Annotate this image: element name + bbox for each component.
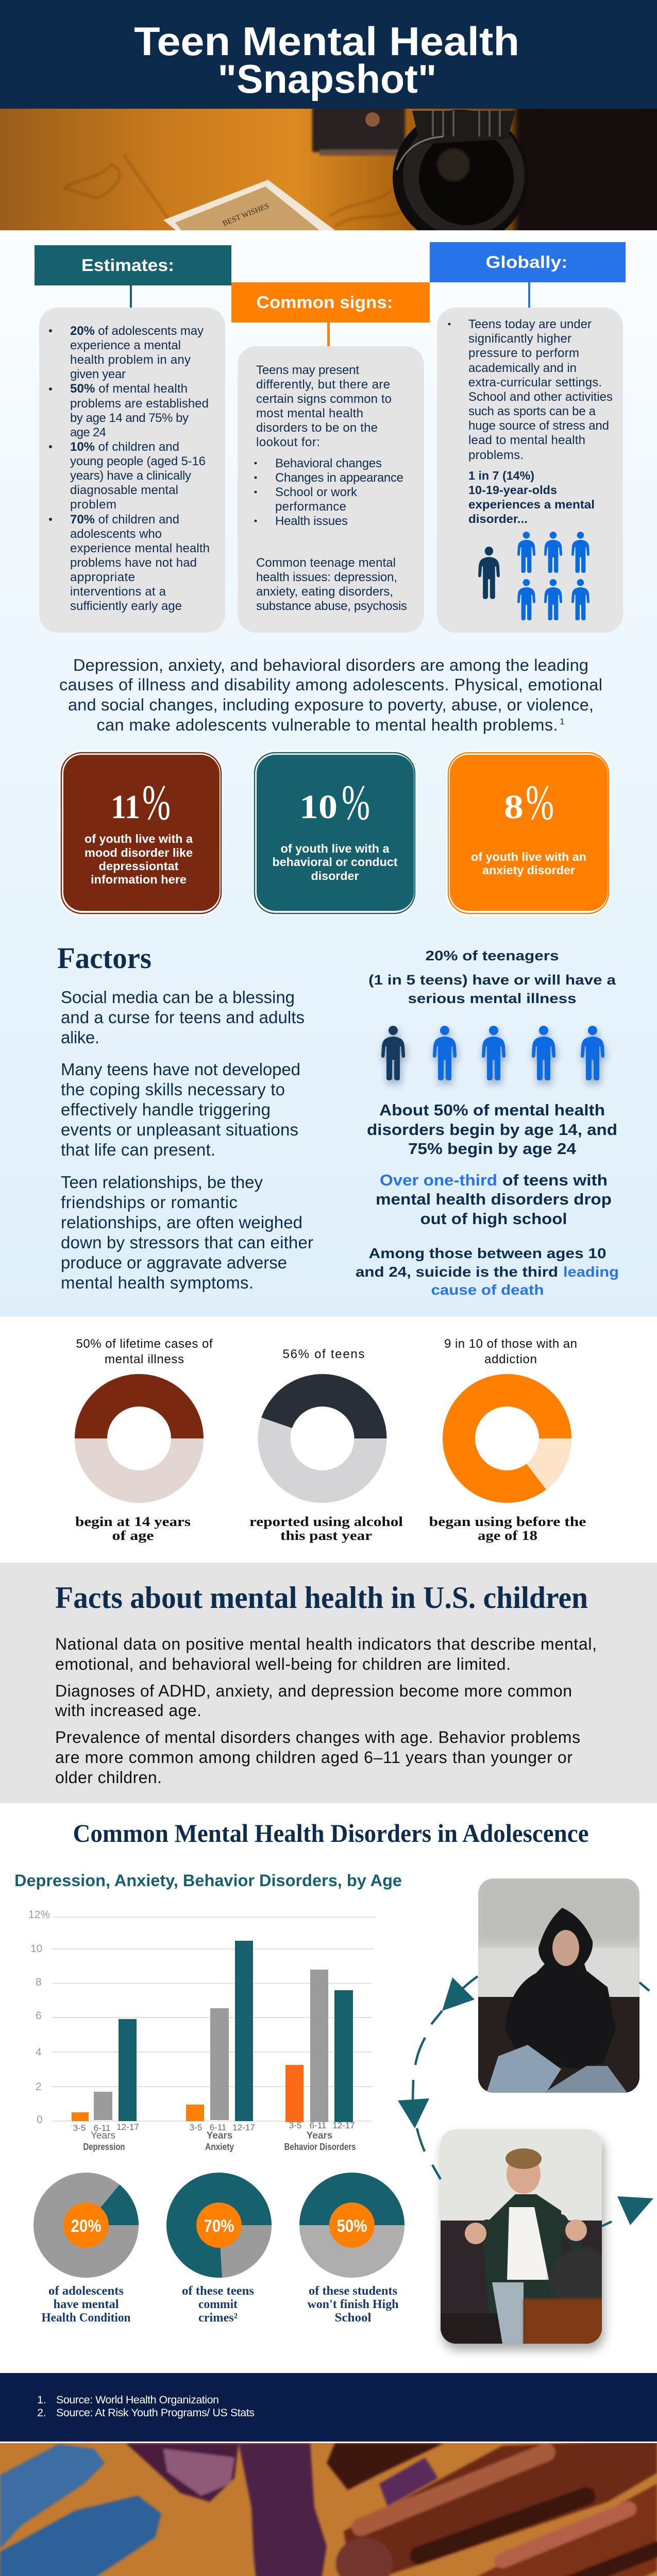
title: "Snapshot": [217, 56, 437, 101]
intro paragraph: [59, 656, 602, 734]
panel: factors: [57, 941, 313, 1292]
bar chart: disorders by age: [14, 1871, 402, 2152]
text: globally: experiences a mental: [468, 498, 595, 511]
text: common signs: Behavioral changes: [275, 456, 382, 470]
text: suicide: cause of death: [431, 1282, 544, 1298]
list: estimates: appropriate: [70, 570, 135, 584]
text: globally: pressure to perform: [468, 346, 579, 360]
text: factors: Social media can be a blessing: [61, 988, 295, 1007]
text: common signs: differently, but there are: [256, 378, 390, 392]
text: factors: [61, 988, 313, 1292]
text: factors: that life can present.: [61, 1140, 215, 1159]
text: high school dropout: out of high school: [420, 1210, 567, 1228]
stat card: 8%: %: [526, 775, 554, 831]
stat card: 8%: [446, 750, 611, 916]
donut chart: addiction: 9 in 10 of those with an: [444, 1337, 577, 1351]
header band: [0, 0, 657, 109]
title: [134, 19, 519, 101]
stat card: 10%: disorder: [311, 869, 359, 883]
donut chart: alcohol: 56% of teens: [282, 1347, 365, 1361]
stat card: 11%: %: [142, 775, 171, 831]
list: estimates: 10% of children and: [70, 440, 179, 454]
painting: reaching hands with heading: [0, 2439, 657, 2576]
text: common signs: most mental health: [256, 406, 363, 420]
list: estimates: 20% of adolescents may: [70, 324, 204, 338]
text: facts: with increased age.: [55, 1701, 201, 1720]
camera body: [312, 106, 405, 152]
text: common signs: Health issues: [275, 514, 348, 528]
pie chart: 70%: commit: [198, 2298, 238, 2311]
pie chart: 70%: of these teens: [182, 2284, 254, 2298]
text: common signs: [255, 363, 407, 613]
pie chart: 20%: have mental: [54, 2298, 119, 2311]
text: high school dropout: Over one-third: [380, 1171, 497, 1189]
text: globally: Teens today are under: [468, 317, 592, 331]
category labels: Years: [91, 2130, 115, 2141]
list: estimates: problems are established: [70, 397, 209, 411]
category labels: [73, 2121, 356, 2152]
axis labels: 10: [30, 1943, 42, 1955]
text: common signs: Teens may present: [256, 363, 359, 377]
text: factors: effectively handle triggering: [61, 1100, 271, 1119]
list: estimates: age 24: [70, 426, 106, 439]
donut chart: addiction: [429, 1337, 586, 1543]
text: factors: events or unpleasant situations: [61, 1120, 298, 1139]
text: globally: disorder...: [468, 512, 528, 526]
text: globally: [448, 317, 613, 526]
stat card: 11%: [59, 750, 223, 916]
text: factors: down by stressors that can either: [61, 1233, 313, 1252]
text: globally: significantly higher: [468, 332, 571, 346]
title: Teen Mental Health: [134, 19, 519, 64]
sources band: 1.: [37, 2394, 46, 2406]
list: estimates: 70% of children and: [70, 513, 179, 527]
text: facts: [55, 1635, 597, 1787]
stat card: 11%: depressiontat: [99, 859, 179, 873]
text: suicide: and 24, suicide is the third: [356, 1264, 558, 1280]
text: age of onset: [367, 1101, 617, 1158]
stat card: 11%: of youth live with a: [85, 832, 193, 845]
donut chart: alcohol: reported using alcohol: [249, 1514, 403, 1529]
category labels: 6-11: [94, 2123, 110, 2133]
text: common signs: certain signs common to: [256, 392, 392, 406]
text: one in five teens: (1 in 5 teens) have or will have a: [368, 972, 616, 988]
text: common signs: substance abuse, psychosis: [256, 599, 407, 613]
category labels: 12-17: [332, 2121, 355, 2130]
text: age of onset: 75% begin by age 24: [408, 1140, 577, 1158]
panel: common signs: [231, 282, 430, 633]
heading: factors: Factors: [57, 941, 151, 975]
text: facts: National data on positive mental health indicators that describe mental,: [55, 1635, 597, 1653]
panel: teen statistics: [356, 948, 619, 1298]
axis labels: 6: [36, 2010, 42, 2022]
list: estimates: years) have a clinically: [70, 469, 191, 483]
text: high school dropout: [376, 1171, 612, 1228]
heading: common signs: [231, 282, 430, 323]
axis labels: 12%: [28, 1909, 50, 1921]
text: factors: friendships or romantic: [61, 1193, 238, 1212]
stat card: 10%: behavioral or conduct: [272, 855, 398, 869]
hero photo: camera on a map: [0, 109, 657, 230]
text: suicide: [356, 1245, 619, 1298]
pie chart: 50%: [299, 2173, 405, 2325]
list: estimates: health problem in any: [70, 353, 191, 367]
category labels: Anxiety: [205, 2142, 234, 2152]
stat card: 11%: 11: [111, 788, 140, 826]
donut chart: alcohol: [249, 1347, 403, 1543]
text: facts: emotional, and behavioral well-being for children are limited.: [55, 1655, 511, 1673]
text: common signs: lookout for:: [256, 435, 320, 449]
category labels: 3-5: [73, 2123, 86, 2133]
text: globally: School and other activities: [468, 390, 613, 404]
text: factors: alike.: [61, 1028, 99, 1047]
bars: behavior disorders: [285, 1970, 353, 2122]
list: estimates: experience a mental: [70, 338, 181, 352]
text: common signs: Common teenage mental: [256, 556, 396, 570]
category labels: 3-5: [289, 2121, 301, 2130]
intro paragraph: and social changes, including exposure to poverty, abuse, or violence,: [68, 696, 594, 714]
donut chart: alcohol: this past year: [280, 1528, 372, 1543]
list: estimates: 50% of mental health: [70, 382, 188, 396]
bars: anxiety: [186, 1941, 253, 2121]
heading: facts: Facts about mental health in U.S. children: [55, 1581, 588, 1615]
donut chart: addiction: began using before the: [429, 1514, 586, 1529]
list: estimates: interventions at a: [70, 585, 166, 599]
pie chart: 50%: 50%: [337, 2216, 367, 2236]
bars: depression: [72, 2019, 137, 2121]
list: estimates: problem: [70, 498, 116, 512]
pie chart: 50%: won't finish High: [307, 2298, 399, 2311]
donut chart: lifetime cases: of age: [112, 1528, 154, 1543]
intro paragraph: 1: [560, 717, 565, 726]
pie chart: 50%: of these students: [309, 2284, 397, 2298]
text: one in five teens: 20% of teenagers: [426, 948, 559, 963]
category labels: 12-17: [116, 2122, 139, 2132]
list: estimates: sufficiently early age: [70, 599, 182, 613]
pie chart: 20%: 20%: [71, 2216, 101, 2236]
heading: common disorders: Common Mental Health Disorders in Adolescence: [73, 1819, 588, 1848]
text: factors: and a curse for teens and adults: [61, 1008, 305, 1027]
text: one in five teens: serious mental illness: [408, 991, 576, 1006]
heading: estimates: Estimates:: [81, 256, 174, 275]
stat card: 8%: 8: [504, 788, 524, 826]
stat card: 10%: of youth live with a: [280, 842, 390, 855]
text: globally: 10-19-year-olds: [468, 483, 557, 497]
text: globally: lead to mental health: [468, 433, 585, 447]
pie chart: 70%: [166, 2173, 272, 2325]
panel: facts about mental health: [0, 1563, 657, 1803]
main light background: [0, 230, 657, 1316]
category labels: Years: [307, 2130, 332, 2141]
donut chart: addiction: age of 18: [478, 1528, 537, 1543]
text: globally: academically and in: [468, 361, 577, 375]
sources band: Source: World Health Organization: [56, 2394, 219, 2406]
text: age of onset: About 50% of mental health: [379, 1101, 605, 1119]
stat card: 10%: 10: [299, 788, 338, 826]
list: estimates: adolescents who: [70, 527, 162, 541]
category labels: 12-17: [232, 2123, 255, 2132]
heading: common signs: Common signs:: [257, 293, 393, 312]
hero photo: camera on a map: BEST WISHES: [222, 202, 271, 228]
text: globally: problems.: [468, 448, 524, 462]
stat card: 10%: [253, 750, 416, 916]
text: suicide: Among those between ages 10: [369, 1245, 606, 1261]
heading: globally: [430, 242, 626, 282]
pie chart: 20%: of adolescents: [48, 2284, 124, 2298]
panel: globally: [430, 242, 626, 633]
category labels: Depression: [83, 2142, 125, 2152]
list: estimates: young people (aged 5-16: [70, 454, 206, 468]
text: age of onset: disorders begin by age 14, and: [367, 1121, 617, 1139]
axis labels: 8: [36, 1976, 42, 1988]
text: common signs: anxiety, eating disorders,: [256, 585, 393, 599]
text: globally: extra-curricular settings.: [468, 376, 602, 389]
category labels: 6-11: [210, 2123, 226, 2132]
list: estimates: given year: [70, 367, 126, 381]
text: factors: produce or aggravate adverse: [61, 1253, 287, 1272]
text: common signs: School or work: [275, 485, 358, 499]
list: estimates: [49, 324, 210, 613]
donut chart: lifetime cases: 50% of lifetime cases of: [76, 1337, 213, 1351]
text: factors: mental health symptoms.: [61, 1273, 254, 1292]
category labels: Years: [207, 2130, 232, 2141]
donut chart: addiction: addiction: [484, 1352, 537, 1366]
list: estimates: diagnosable mental: [70, 483, 178, 497]
donut chart: lifetime cases: mental illness: [105, 1352, 184, 1366]
text: common signs: Changes in appearance: [275, 471, 403, 485]
pie chart: 20%: Health Condition: [41, 2311, 131, 2325]
axis labels: [28, 1909, 50, 2126]
donut chart: lifetime cases: [75, 1337, 213, 1543]
text: facts: Prevalence of mental disorders changes with age. Behavior problems: [55, 1728, 580, 1747]
text: facts: Diagnoses of ADHD, anxiety, and depression become more common: [55, 1682, 572, 1700]
text: common signs: health issues: depression,: [256, 570, 397, 584]
text: factors: the coping skills necessary to: [61, 1080, 285, 1099]
list: estimates: problems have not had: [70, 556, 197, 570]
pie chart: 50%: School: [335, 2311, 372, 2325]
text: common signs: disorders to be on the: [256, 421, 378, 435]
intro paragraph: causes of illness and disability among adolescents. Physical, emotional: [59, 675, 602, 694]
sources band: 2.: [37, 2406, 46, 2419]
list: estimates: experience mental health: [70, 541, 210, 555]
photo: teen in black hoodie: [478, 1878, 639, 2095]
arrows: dashed circular cycle: [398, 1976, 653, 2226]
stat card: 11%: mood disorder like: [85, 846, 193, 859]
pie chart: 70%: 70%: [204, 2216, 234, 2236]
text: common signs: performance: [275, 500, 346, 514]
text: factors: Teen relationships, be they: [61, 1173, 263, 1192]
category labels: 3-5: [190, 2123, 202, 2132]
text: globally: huge source of stress and: [468, 419, 609, 433]
pie chart: 70%: crimes²: [198, 2311, 238, 2325]
category labels: Behavior Disorders: [284, 2142, 356, 2152]
chart title: Depression, Anxiety, Behavior Disorders, by Age: [14, 1871, 402, 1890]
heading: estimates: [35, 245, 231, 285]
icon: one in seven people: [478, 532, 589, 620]
lens: [393, 110, 529, 230]
donut chart: lifetime cases: begin at 14 years: [75, 1514, 191, 1529]
stat card: 10%: %: [342, 775, 370, 831]
text: facts: are more common among children aged 6–11 years than younger or: [55, 1748, 572, 1767]
intro paragraph: Depression, anxiety, and behavioral disorders are among the leading: [73, 656, 588, 674]
category labels: 6-11: [310, 2121, 326, 2130]
photo: smiling teen talking: [441, 2129, 614, 2345]
axis labels: 0: [37, 2114, 43, 2126]
text: globally: 1 in 7 (14%): [468, 469, 534, 482]
sources band: Source: At Risk Youth Programs/ US Stats: [56, 2406, 255, 2419]
stat card: 8%: anxiety disorder: [482, 863, 575, 877]
intro paragraph: can make adolescents vulnerable to mental health problems.: [97, 716, 558, 734]
sources band: [0, 2373, 657, 2442]
text: one in five teens: [368, 948, 616, 1006]
text: factors: relationships, are often weighed: [61, 1213, 302, 1232]
postcard: [163, 180, 335, 230]
text: factors: Many teens have not developed: [61, 1060, 300, 1079]
text: globally: such as sports can be a: [468, 404, 596, 418]
pie chart: 20%: [33, 2173, 139, 2325]
list: estimates: by age 14 and 75% by: [70, 411, 189, 425]
axis labels: 2: [36, 2081, 42, 2093]
panel: estimates: [35, 245, 231, 633]
text: facts: older children.: [55, 1768, 162, 1787]
stat card: 11%: information here: [91, 873, 187, 886]
text: high school dropout: mental health disorders drop: [376, 1190, 612, 1208]
icon: five people: [381, 1026, 604, 1080]
axis labels: 4: [36, 2046, 42, 2058]
stat card: 8%: of youth live with an: [471, 850, 586, 863]
text: high school dropout: of teens with: [502, 1171, 608, 1189]
heading: globally: Globally:: [485, 252, 568, 272]
text: suicide: leading: [563, 1264, 619, 1280]
